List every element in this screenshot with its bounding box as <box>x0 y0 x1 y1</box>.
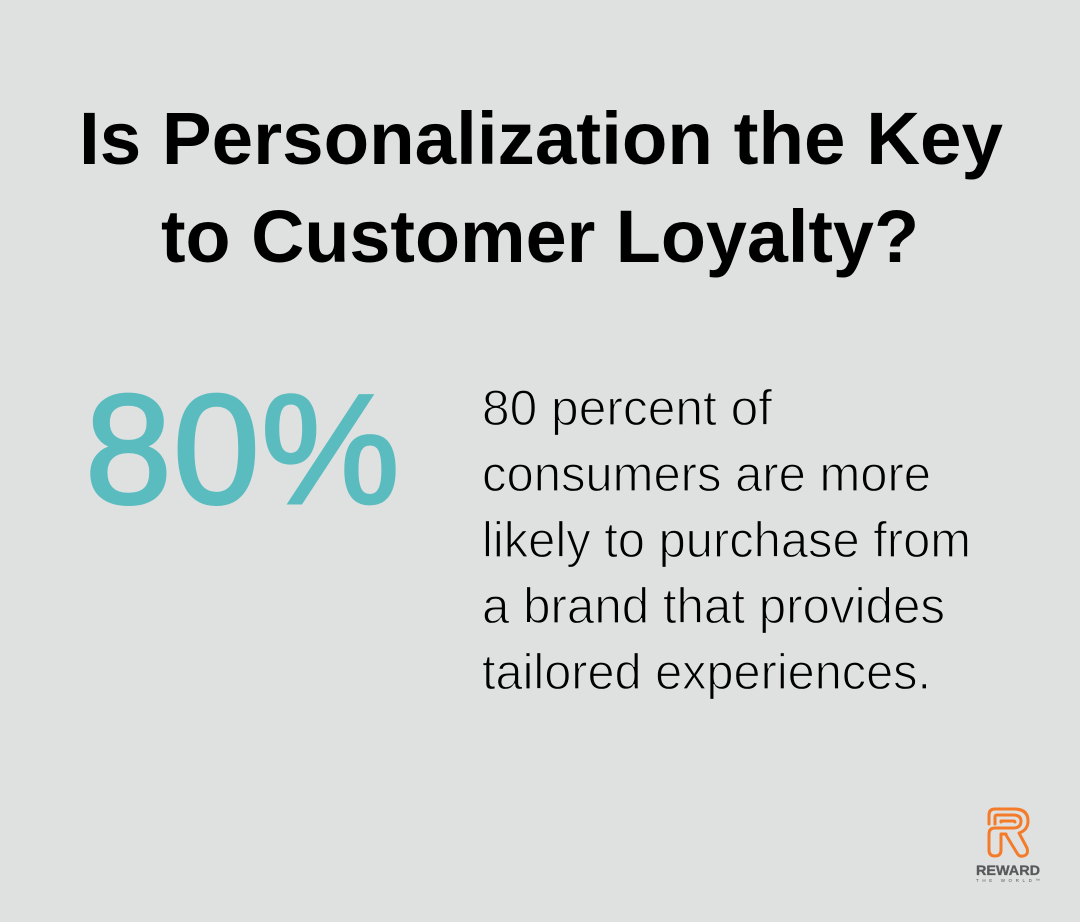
logo tagline: THE WORLD™ <box>976 878 1040 883</box>
description text block: consumers are more <box>482 446 931 502</box>
description text block <box>482 380 971 700</box>
description text block: likely to purchase from <box>482 512 971 568</box>
big statistic: 80%: 80% <box>85 363 400 537</box>
title: Is Personalization the Key <box>79 97 1003 180</box>
title: to Customer Loyalty? <box>161 195 919 278</box>
title <box>79 97 1003 278</box>
logo wordmark: REWARD <box>976 863 1040 878</box>
logo: Reward the World <box>976 809 1040 883</box>
description text block: tailored experiences. <box>482 644 931 700</box>
icon: orange R mark <box>989 809 1028 856</box>
description text block: a brand that provides <box>482 578 945 634</box>
description text block: 80 percent of <box>482 380 772 436</box>
